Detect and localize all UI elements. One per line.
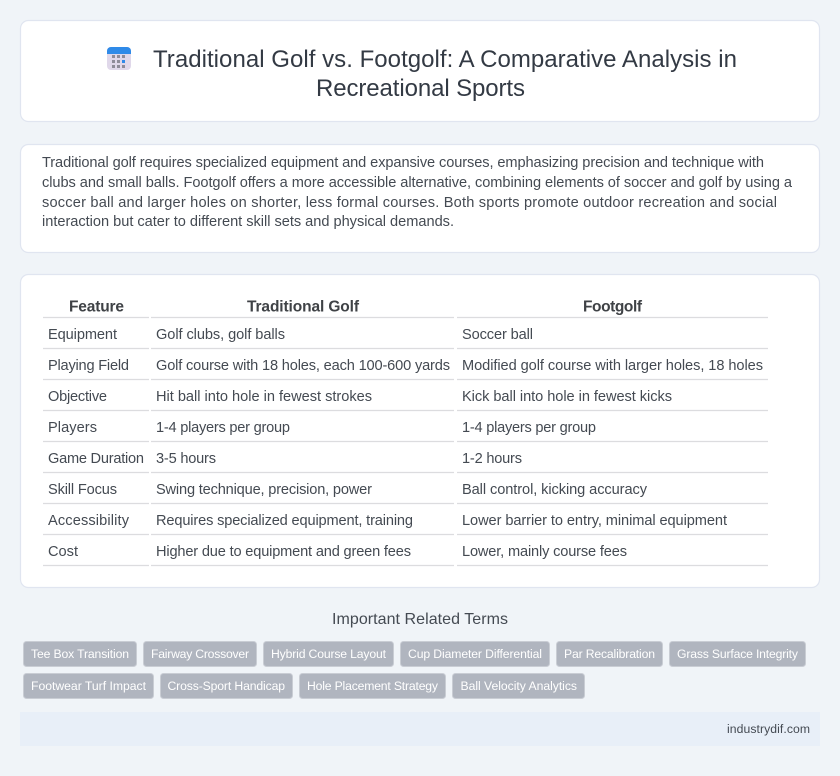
row: skill focus: Swing technique, precision, power xyxy=(156,482,372,498)
row: skill focus: Skill Focus xyxy=(48,482,117,498)
tags: related terms: Footwear Turf Impact xyxy=(31,679,147,693)
title: Recreational Sports xyxy=(316,75,525,102)
row: playing field: Golf course with 18 holes, each 100-600 yards xyxy=(156,358,450,374)
table header: Feature xyxy=(69,298,124,316)
panel: comparison table xyxy=(20,274,820,588)
row: accessibility xyxy=(48,513,727,529)
row: players: 1-4 players per group xyxy=(156,420,290,436)
row: skill focus xyxy=(48,482,648,498)
tags: related terms xyxy=(24,642,806,698)
row: players xyxy=(48,420,596,436)
row: equipment xyxy=(48,327,533,343)
tags: related terms: Grass Surface Integrity xyxy=(677,647,799,661)
row: playing field xyxy=(48,358,763,374)
row: game duration: 3-5 hours xyxy=(156,451,216,467)
row: playing field: Modified golf course with larger holes, 18 holes xyxy=(462,358,763,374)
table header: Traditional Golf xyxy=(247,298,360,316)
row: playing field: Playing Field xyxy=(48,358,129,374)
tags: related terms: Hole Placement Strategy xyxy=(307,679,439,693)
row: accessibility: Accessibility xyxy=(48,513,130,529)
title xyxy=(153,46,737,102)
row: objective: Hit ball into hole in fewest strokes xyxy=(156,389,372,405)
footer xyxy=(20,712,820,746)
tags: related terms: Cup Diameter Differential xyxy=(408,647,542,661)
row: equipment: Equipment xyxy=(48,327,117,343)
tags: related terms: Par Recalibration xyxy=(564,647,655,661)
tags: related terms: Fairway Crossover xyxy=(151,647,249,661)
summary text: Traditional golf requires specialized equipment and expansive courses, emphasizing precision and technique with xyxy=(42,155,764,171)
summary text: soccer ball and larger holes on shorter, less formal courses. Both sports promote outdoor recreation and social xyxy=(42,195,777,211)
row: equipment: Golf clubs, golf balls xyxy=(156,327,285,343)
row: accessibility: Lower barrier to entry, minimal equipment xyxy=(462,513,727,529)
row: skill focus: Ball control, kicking accuracy xyxy=(462,482,648,498)
row: cost: Lower, mainly course fees xyxy=(462,544,627,560)
summary text: interaction but cater to different skill sets and physical demands. xyxy=(42,214,454,230)
row: objective: Kick ball into hole in fewest kicks xyxy=(462,389,672,405)
table header: Footgolf xyxy=(583,298,643,316)
summary text: clubs and small balls. Footgolf offers a more accessible alternative, combining elements of soccer and golf by using a xyxy=(42,175,793,191)
row: equipment: Soccer ball xyxy=(462,327,533,343)
row: game duration xyxy=(48,451,522,467)
row: game duration: 1-2 hours xyxy=(462,451,522,467)
heading: related terms: Important Related Terms xyxy=(332,611,508,628)
title: Traditional Golf vs. Footgolf: A Comparative Analysis in xyxy=(153,46,737,73)
tags: related terms: Cross-Sport Handicap xyxy=(168,679,285,693)
tags: related terms: Ball Velocity Analytics xyxy=(460,679,577,693)
row: cost: Cost xyxy=(48,544,78,560)
tags: related terms: Hybrid Course Layout xyxy=(271,647,387,661)
table header xyxy=(69,298,643,316)
row: cost: Higher due to equipment and green fees xyxy=(156,544,411,560)
row: players: Players xyxy=(48,420,97,436)
row: objective: Objective xyxy=(48,389,107,405)
footer: industrydif.com xyxy=(727,722,810,736)
row: objective xyxy=(48,389,672,405)
panel: title card xyxy=(20,20,820,122)
icon: calendar xyxy=(107,47,131,70)
panel: summary xyxy=(20,144,820,252)
tags: related terms: Tee Box Transition xyxy=(31,647,129,661)
summary text xyxy=(42,155,793,230)
row: accessibility: Requires specialized equipment, training xyxy=(156,513,413,529)
row: players: 1-4 players per group xyxy=(462,420,596,436)
row: game duration: Game Duration xyxy=(48,451,144,467)
row: cost xyxy=(48,544,627,560)
